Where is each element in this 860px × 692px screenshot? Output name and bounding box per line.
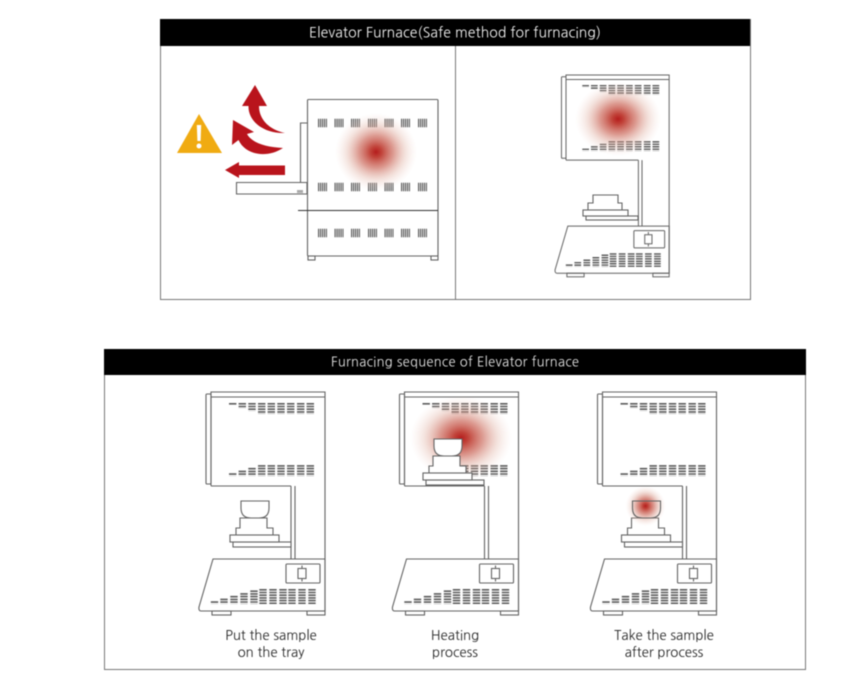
heat glow: hot sample: [626, 486, 666, 526]
step 1: put the sample on the tray: [199, 392, 325, 659]
heat glow: heating: [410, 396, 512, 480]
diagram: conventional furnace with door open: [236, 100, 438, 260]
caption: step 3: Take the sample: [614, 629, 714, 642]
heading bar: safe method: Elevator Furnace(Safe method for furnacing): [309, 26, 601, 40]
heat glow: chamber: [575, 82, 661, 156]
icon: warning triangle: [177, 114, 222, 153]
heading bar: safe method: [160, 19, 750, 46]
caption: step 1: Put the sample: [225, 629, 317, 642]
caption: step 2: process: [432, 646, 478, 659]
panel: elevator furnace safe method: [160, 19, 750, 300]
step 3: take the sample after process: [590, 392, 716, 659]
hot bowl outline: [632, 501, 660, 518]
tray and bowl raised: [423, 439, 484, 485]
panel: furnacing sequence: [104, 349, 806, 670]
tray with stepped base: [583, 195, 638, 220]
tray and bowl lowered: [230, 501, 291, 547]
arrow: heat curving out: [232, 120, 283, 154]
arrow: heat straight out: [225, 162, 285, 178]
caption: step 1: on the tray: [238, 646, 304, 659]
arrow: heat rising up: [242, 85, 285, 133]
heat glow: conventional furnace: [335, 113, 417, 191]
caption: step 3: after process: [625, 646, 704, 659]
diagram: elevator furnace closed chamber: [555, 75, 669, 277]
caption: step 2: Heating: [431, 629, 479, 642]
tray and bowl lowered: [622, 518, 682, 547]
step 2: heating process: [392, 392, 518, 659]
heading bar: furnacing sequence: [104, 349, 806, 375]
heading bar: furnacing sequence: Furnacing sequence of Elevator furnace: [331, 356, 579, 368]
